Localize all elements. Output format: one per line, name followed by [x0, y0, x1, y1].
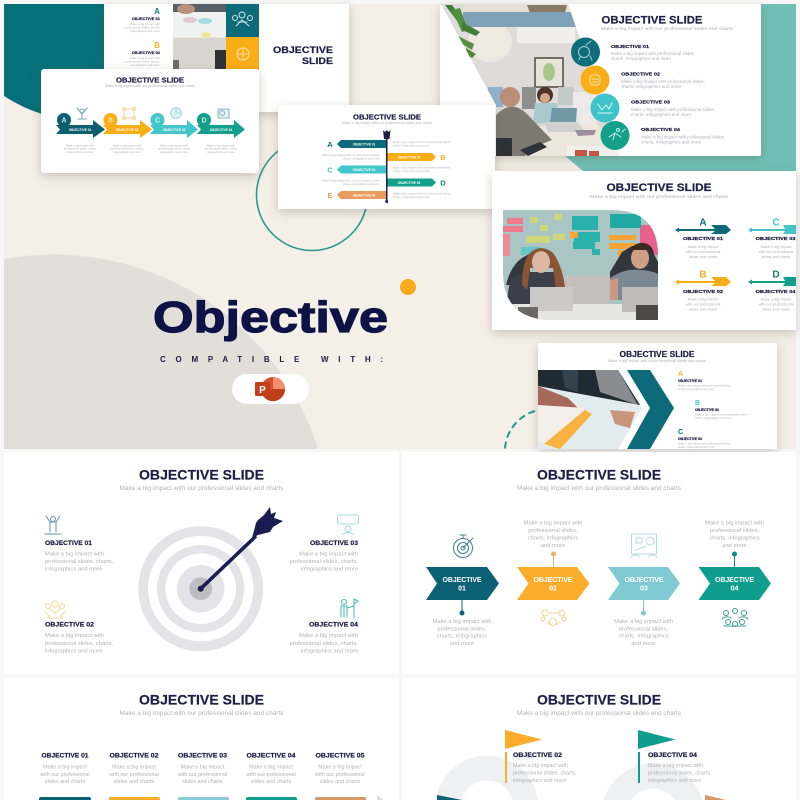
- arrow in target: [198, 507, 283, 592]
- objective B text: professional slides, charts,: [125, 60, 160, 64]
- arrow captions: infographics and more: [66, 150, 94, 154]
- objective C arrow: C: [772, 218, 780, 228]
- banner E: [327, 191, 386, 200]
- arrow C: [150, 108, 198, 138]
- timeline captions: charts, infographics and more: [343, 156, 380, 160]
- objective C arrow: Make a big impact: [761, 245, 792, 249]
- heading: OBJECTIVE SLIDE: [353, 112, 421, 122]
- banner A: OBJECTIVE 01: [353, 142, 375, 146]
- timeline captions: [322, 140, 451, 199]
- objective C arrow: [748, 218, 796, 259]
- objective B text: infographics and more: [130, 63, 160, 67]
- banner D: [387, 178, 446, 188]
- timeline captions: Make a big impact with our professional slides,: [393, 140, 451, 144]
- arrow A: A: [61, 118, 67, 124]
- column 05: slides and charts: [320, 779, 361, 785]
- chevron 01: OBJECTIVE: [442, 577, 482, 584]
- subtitle: Make a big impact with our professional slides and charts: [590, 194, 729, 200]
- banner A: A: [327, 140, 333, 149]
- teal chevron: [627, 370, 674, 449]
- objective 01: [45, 516, 114, 572]
- flag 04: OBJECTIVE 04: [648, 752, 698, 759]
- arrow captions: professional slides, charts: [205, 147, 238, 151]
- powerpoint badge: P: [259, 385, 266, 396]
- item C: charts, infographics and more: [678, 445, 715, 449]
- arrow B: [103, 108, 152, 138]
- objective B arrow: OBJECTIVE 02: [683, 289, 724, 294]
- chevron 03: charts, infographics: [618, 634, 669, 640]
- timeline captions: charts, infographics and more: [393, 169, 430, 173]
- item B: charts, infographics and more: [695, 416, 732, 420]
- column 04: slides and charts: [251, 779, 292, 785]
- item C: Make a big impact with professional slides,: [678, 442, 731, 446]
- objective A arrow: with our professional: [686, 250, 721, 254]
- objective 02: OBJECTIVE 02: [45, 622, 94, 628]
- objective 02 row: OBJECTIVE 02: [621, 72, 660, 78]
- column 02: [108, 752, 160, 800]
- powerpoint badge: [232, 374, 309, 404]
- arrow captions: Make a big impact with: [160, 144, 189, 148]
- item C: C: [678, 429, 683, 436]
- objective 01: professional slides, charts,: [45, 559, 114, 565]
- flag 02: professional slides, charts,: [513, 770, 577, 776]
- flag 02: [505, 730, 577, 784]
- objective A text: infographics and more: [130, 29, 160, 33]
- chevron 04: [698, 521, 771, 626]
- chevron 01: and more: [450, 641, 474, 647]
- chevron 03: professional slides,: [619, 626, 669, 632]
- item A: charts, infographics and more: [678, 387, 715, 391]
- objective 02: Make a big impact with: [45, 633, 104, 639]
- objective 03 row: charts, infographics and more: [631, 112, 692, 117]
- objective A arrow: [675, 218, 731, 259]
- column 05: Make a big impact: [318, 764, 362, 770]
- orange dot: [400, 279, 416, 295]
- banner D: D: [440, 178, 446, 188]
- chevron 04: Make a big impact with: [705, 521, 764, 527]
- chevron 01: professional slides,: [437, 626, 487, 632]
- flag 03: [705, 795, 726, 800]
- heading: OBJECTIVE SLIDE: [602, 14, 702, 26]
- objective A arrow: A: [699, 218, 707, 228]
- grey chevron: [377, 795, 383, 800]
- column 05: with our professional: [314, 772, 365, 778]
- timeline captions: charts, infographics and more: [393, 144, 430, 148]
- objective A arrow: slides and charts: [689, 255, 717, 259]
- item B: Make a big impact with professional slides,: [695, 412, 748, 416]
- heading: OBJECTIVE SLIDE: [537, 466, 661, 482]
- heading: OBJECTIVE SLIDE: [537, 692, 661, 708]
- subtitle: Make a big impact with our professional slides and charts: [517, 485, 681, 492]
- arrow captions: professional slides, charts: [111, 147, 144, 151]
- objective B text: [125, 41, 161, 67]
- photo: paperwork: [538, 370, 642, 449]
- slide heading: OBJECTIVE: [273, 45, 333, 56]
- arrow captions: infographics and more: [207, 150, 235, 154]
- column 01: OBJECTIVE 01: [42, 752, 89, 760]
- objective A text: professional slides, charts,: [125, 26, 160, 30]
- column 03: OBJECTIVE 03: [178, 752, 228, 760]
- compatibility line: COMPATIBLE WITH:: [160, 355, 383, 364]
- column 05: OBJECTIVE 05: [316, 752, 365, 760]
- objective 04 row: Make a big impact with professional slides,: [641, 134, 725, 140]
- chevron 03: 03: [640, 586, 648, 592]
- chevron 01: 01: [458, 586, 466, 592]
- arrow captions: infographics and more: [113, 150, 141, 154]
- objective 01 row: Make a big impact with professional slides,: [611, 51, 695, 56]
- column 03: [177, 752, 229, 800]
- subtitle: Make a big impact with our professional slides and charts: [342, 121, 432, 125]
- arrow D: D: [201, 118, 207, 124]
- objective 04 row: [600, 121, 725, 150]
- chevron 01: Make a big impact with: [433, 619, 491, 625]
- panel: target objectives: [4, 452, 399, 674]
- column 02: slides and charts: [114, 779, 155, 785]
- arrow A: OBJECTIVE 01: [69, 128, 91, 132]
- chevron 03: [608, 534, 680, 647]
- grey arches: [436, 756, 702, 800]
- objective 03: infographics and more: [301, 566, 358, 572]
- objective D arrow: Make a big impact: [761, 298, 792, 302]
- objective C arrow: OBJECTIVE 03: [756, 236, 796, 241]
- panel: flags: [402, 678, 796, 800]
- item C: OBJECTIVE 03: [678, 437, 702, 441]
- chevron 02: OBJECTIVE: [534, 577, 573, 584]
- flag 02: infographics and more: [513, 778, 566, 784]
- subtitle: Make a big impact with our professional slides and charts: [105, 84, 195, 88]
- arrow captions: Make a big impact with: [113, 144, 142, 148]
- column 04: [245, 752, 297, 800]
- objective A text: [125, 7, 161, 33]
- objective 01: Make a big impact with: [45, 552, 104, 558]
- objective 01 row: OBJECTIVE 01: [611, 44, 649, 50]
- chevron 02: 02: [549, 586, 557, 592]
- timeline captions: Make a big impact with our professional slides,: [393, 192, 451, 196]
- column 04: with our professional: [245, 772, 296, 778]
- item A: Make a big impact with professional slides,: [678, 384, 731, 388]
- flag 04: Make a big impact with: [648, 763, 703, 769]
- objective 04: [290, 599, 358, 654]
- heading: OBJECTIVE SLIDE: [620, 350, 694, 359]
- flag 02: Make a big impact with: [513, 763, 568, 769]
- column 03: Make a big impact: [181, 764, 225, 770]
- column 02: Make a big impact: [112, 764, 156, 770]
- banner B: [387, 153, 446, 162]
- objective 03: OBJECTIVE 03: [310, 540, 358, 547]
- objective 04: OBJECTIVE 04: [309, 622, 358, 628]
- objective A text: Make a big impact with: [129, 22, 160, 26]
- flag 01: [437, 795, 462, 800]
- arrow captions: Make a big impact with: [66, 144, 95, 148]
- teal icon tile: [226, 4, 259, 37]
- item A: OBJECTIVE 01: [678, 379, 702, 383]
- slide heading: [273, 45, 333, 67]
- hero banner: [4, 4, 796, 449]
- objective 01: infographics and more: [45, 566, 102, 572]
- objective D arrow: with our professional: [759, 302, 794, 306]
- objective B arrow: slides and charts: [689, 308, 717, 312]
- objective A text: A: [154, 7, 160, 16]
- timeline captions: Make a big impact with our professional slides,: [393, 166, 451, 170]
- chevron 02: [517, 521, 590, 626]
- chevron 03: and more: [631, 641, 656, 647]
- arrow D: OBJECTIVE 04: [210, 128, 232, 132]
- column 02: with our professional: [108, 772, 159, 778]
- column 04: OBJECTIVE 04: [246, 752, 296, 760]
- objective 03 row: OBJECTIVE 03: [631, 100, 670, 106]
- objective 03: Make a big impact with: [299, 552, 358, 558]
- column 03: slides and charts: [182, 779, 223, 785]
- teal corner shape: [4, 4, 106, 115]
- objective C arrow: with our professional: [759, 250, 794, 254]
- arrow captions: Make a big impact with: [207, 144, 236, 148]
- chevron 04: professional slides,: [710, 528, 760, 534]
- objective B text: B: [154, 41, 160, 50]
- objective 03: [290, 515, 358, 572]
- item A: A: [678, 371, 683, 378]
- banner A: [327, 140, 386, 149]
- chevron 02: professional slides,: [528, 528, 578, 534]
- objective 02 row: charts, infographics and more: [621, 84, 682, 89]
- objective 04: professional slides, charts,: [290, 641, 358, 647]
- objective 02 row: Make a big impact with professional slides,: [621, 79, 705, 84]
- objective 01 row: charts, infographics and more: [611, 56, 672, 61]
- chevron 01: [426, 535, 499, 647]
- slide: arrow process: [41, 69, 259, 173]
- panel: five columns: [4, 678, 399, 800]
- objective C arrow: slides and charts: [762, 255, 790, 259]
- banner B: OBJECTIVE 02: [398, 155, 420, 159]
- objective 03: professional slides, charts,: [290, 559, 358, 565]
- flag 04: infographics and more: [648, 778, 701, 784]
- column 01: [39, 752, 91, 800]
- slide: chevron photo: [538, 343, 777, 449]
- photo: desk: [173, 4, 226, 70]
- arrow captions: [64, 144, 238, 154]
- column 04: Make a big impact: [249, 764, 293, 770]
- objective 02 row: [580, 66, 705, 94]
- column 03: with our professional: [177, 772, 227, 778]
- objective B arrow: with our professional: [686, 302, 721, 306]
- heading: OBJECTIVE SLIDE: [606, 182, 712, 194]
- item A: [678, 371, 731, 391]
- objective 02: [45, 601, 114, 654]
- chevron 02: charts, infographics: [528, 535, 578, 541]
- objective B arrow: Make a big impact: [688, 298, 719, 302]
- banner C: OBJECTIVE 03: [353, 168, 375, 172]
- chevron 02: and more: [541, 543, 565, 549]
- column 01: Make a big impact: [43, 764, 87, 770]
- yellow icon tile: [226, 37, 259, 70]
- top-right slide backdrop: [565, 4, 796, 171]
- objective 03 row: Make a big impact with professional slides,: [631, 107, 715, 112]
- decorative grey circle: [4, 255, 318, 449]
- dashed ring: [505, 411, 535, 449]
- flag 04: [638, 730, 712, 784]
- objective 03 row: [590, 94, 715, 122]
- arrow captions: infographics and more: [160, 150, 188, 154]
- flag 02: OBJECTIVE 02: [513, 752, 563, 759]
- banner C: [327, 166, 386, 174]
- item B: [695, 400, 748, 420]
- target chart: [138, 526, 263, 651]
- objective B text: OBJECTIVE 02: [132, 50, 161, 55]
- column 02: OBJECTIVE 02: [110, 752, 159, 760]
- item C: [678, 429, 731, 449]
- subtitle: Make a big impact with our professional slides and charts: [517, 710, 681, 717]
- subtitle: Make a big impact with our professional slides and charts: [120, 485, 284, 492]
- timeline captions: Make a big impact with our professional slides,: [322, 178, 380, 182]
- objective 02: professional slides, charts,: [45, 641, 114, 647]
- arrow A: [56, 108, 105, 138]
- flag 04: professional slides, charts,: [648, 770, 712, 776]
- green ring: [256, 140, 368, 250]
- arrow C: C: [155, 118, 160, 124]
- photo: team at laptops: [503, 210, 658, 320]
- objective B arrow: [675, 270, 731, 312]
- objective 04 row: OBJECTIVE 04: [641, 127, 680, 133]
- objective B arrow: B: [699, 270, 707, 280]
- banner C: C: [327, 166, 333, 174]
- objective B text: Make a big impact with: [129, 56, 160, 60]
- slide: vertical arrow timeline: [278, 105, 495, 209]
- arrow B: OBJECTIVE 02: [116, 128, 138, 132]
- arrow C: OBJECTIVE 03: [163, 128, 185, 132]
- objective A text: OBJECTIVE 01: [132, 16, 161, 21]
- objective 01 row: [571, 38, 695, 66]
- banner E: E: [327, 191, 333, 200]
- objective D arrow: slides and charts: [762, 308, 790, 312]
- chevron 04: OBJECTIVE: [715, 577, 754, 584]
- objective D arrow: [748, 270, 796, 312]
- objective A arrow: Make a big impact: [688, 245, 719, 249]
- column 01: slides and charts: [45, 779, 86, 785]
- banner D: OBJECTIVE 04: [398, 181, 420, 185]
- subtitle: Make a big impact with our professional slides and charts: [608, 359, 706, 363]
- slide: image with objectives A and B: [104, 4, 349, 112]
- objective D arrow: OBJECTIVE 04: [756, 289, 796, 294]
- panel: chevron process: [402, 452, 796, 674]
- main title: Objective: [153, 293, 388, 342]
- objective 01: OBJECTIVE 01: [45, 540, 92, 547]
- objective 02: infographics and more: [45, 648, 102, 654]
- heading: OBJECTIVE SLIDE: [139, 692, 264, 708]
- slide: team photo with arrows: [492, 171, 796, 330]
- chevron 01: charts, infographics: [437, 634, 487, 640]
- subtitle: Make a big impact with our professional slides and charts: [601, 26, 734, 32]
- arrow captions: professional slides, charts: [158, 147, 191, 151]
- arrow B: B: [108, 118, 113, 124]
- item B: B: [695, 400, 700, 407]
- column 05: [314, 752, 366, 800]
- heading: OBJECTIVE SLIDE: [116, 76, 184, 84]
- chevron 04: charts, infographics: [709, 535, 760, 541]
- objective A arrow: OBJECTIVE 01: [683, 236, 724, 241]
- column 01: with our professional: [39, 772, 90, 778]
- chevron 02: Make a big impact with: [524, 521, 582, 527]
- arrow D: [197, 109, 245, 138]
- subtitle: Make a big impact with our professional slides and charts: [120, 710, 284, 717]
- chevron 03: OBJECTIVE: [624, 577, 664, 584]
- arrow spine: [383, 130, 390, 203]
- slide: photo with four objectives: [440, 4, 761, 156]
- banner E: OBJECTIVE 05: [353, 193, 375, 197]
- banner B: B: [440, 153, 446, 162]
- item B: OBJECTIVE 02: [695, 408, 719, 412]
- objective 04 row: charts, infographics and more: [641, 140, 702, 144]
- timeline captions: Make a big impact with our professional slides,: [322, 153, 380, 157]
- objective 04: infographics and more: [301, 648, 358, 654]
- objective D arrow: D: [772, 270, 780, 280]
- objective 04: Make a big impact with: [299, 633, 358, 639]
- timeline captions: charts, infographics and more: [343, 182, 380, 186]
- chevron 04: and more: [722, 543, 747, 549]
- heading: OBJECTIVE SLIDE: [139, 466, 264, 482]
- photo: office meeting: [440, 4, 630, 156]
- chevron 03: Make a big impact with: [614, 619, 673, 625]
- chevron 04: 04: [731, 586, 738, 592]
- timeline captions: charts, infographics and more: [393, 195, 430, 199]
- slide heading: SLIDE: [302, 56, 333, 67]
- arrow captions: professional slides, charts: [64, 147, 97, 151]
